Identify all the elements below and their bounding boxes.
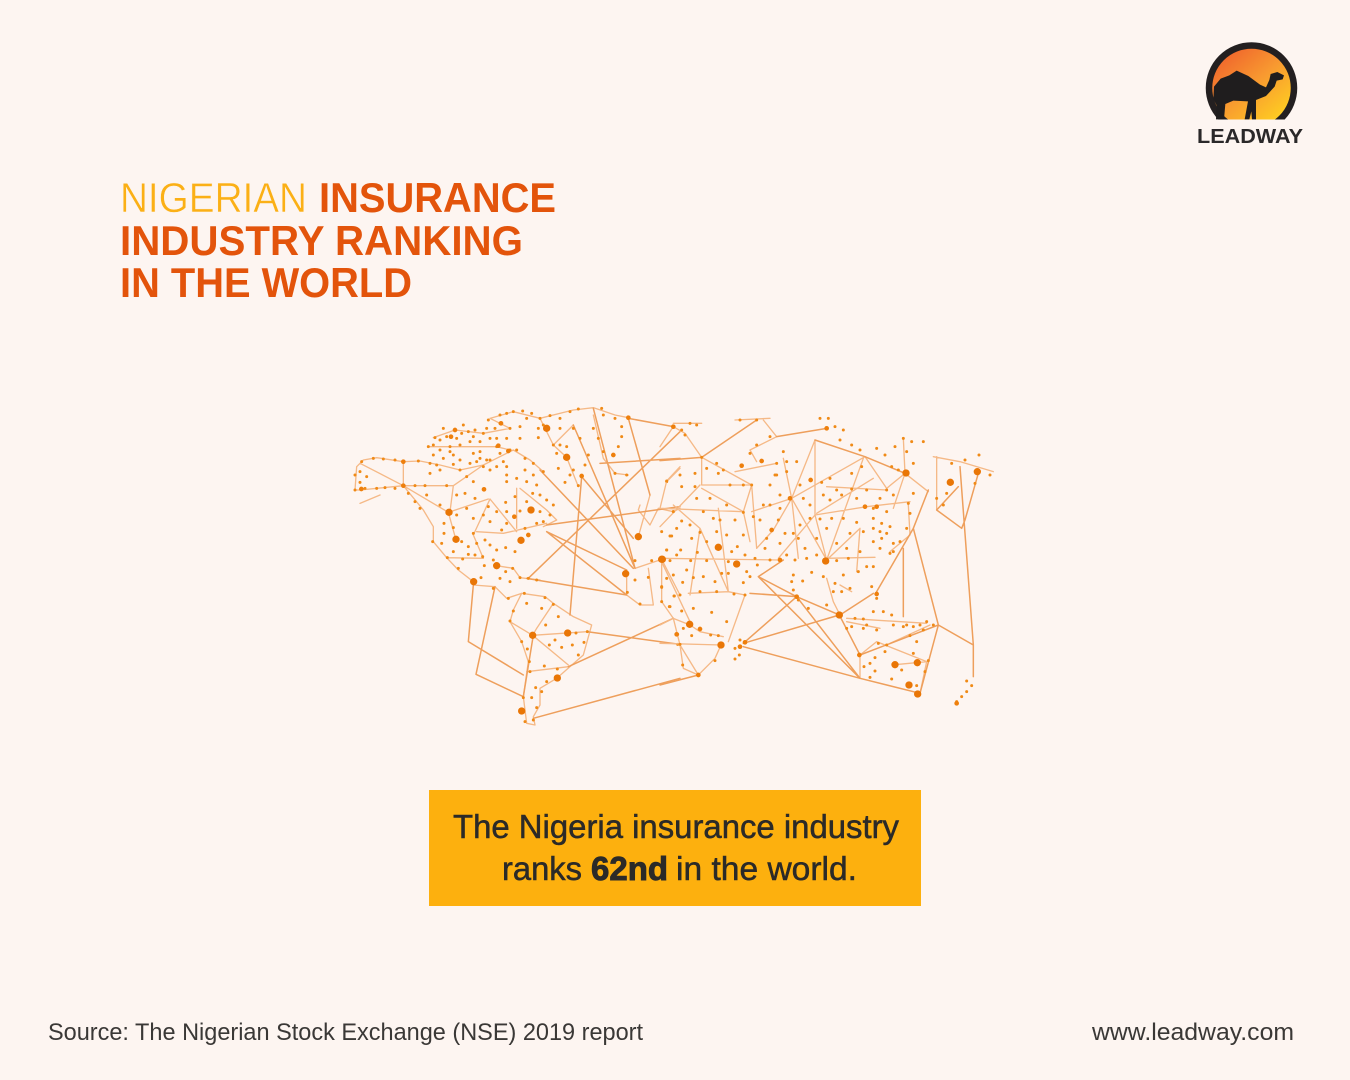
source note: Source: The Nigerian Stock Exchange (NSE) 2019 report	[48, 1019, 643, 1046]
icon: camel	[1213, 71, 1284, 119]
callout text: in the world.	[676, 850, 857, 887]
callout box	[429, 790, 921, 906]
title: INDUSTRY RANKING	[120, 217, 523, 264]
title: INSURANCE	[319, 174, 556, 221]
icon: sun disc	[1212, 48, 1291, 120]
icon: logo ring	[1209, 46, 1294, 130]
website: www.leadway.com	[1091, 1019, 1294, 1046]
logo wordmark: LEADWAY	[1197, 125, 1303, 148]
callout text: The Nigeria insurance industry	[453, 808, 899, 845]
map: western hemisphere	[355, 408, 680, 725]
world network map	[355, 408, 993, 725]
callout text: 62nd	[591, 850, 668, 887]
map: eastern hemisphere	[660, 418, 993, 703]
title: NIGERIAN	[120, 174, 307, 221]
title	[120, 174, 556, 306]
logo: Leadway	[1197, 46, 1303, 148]
title: IN THE WORLD	[120, 259, 412, 306]
callout text	[453, 808, 899, 887]
callout text: ranks	[502, 850, 582, 887]
